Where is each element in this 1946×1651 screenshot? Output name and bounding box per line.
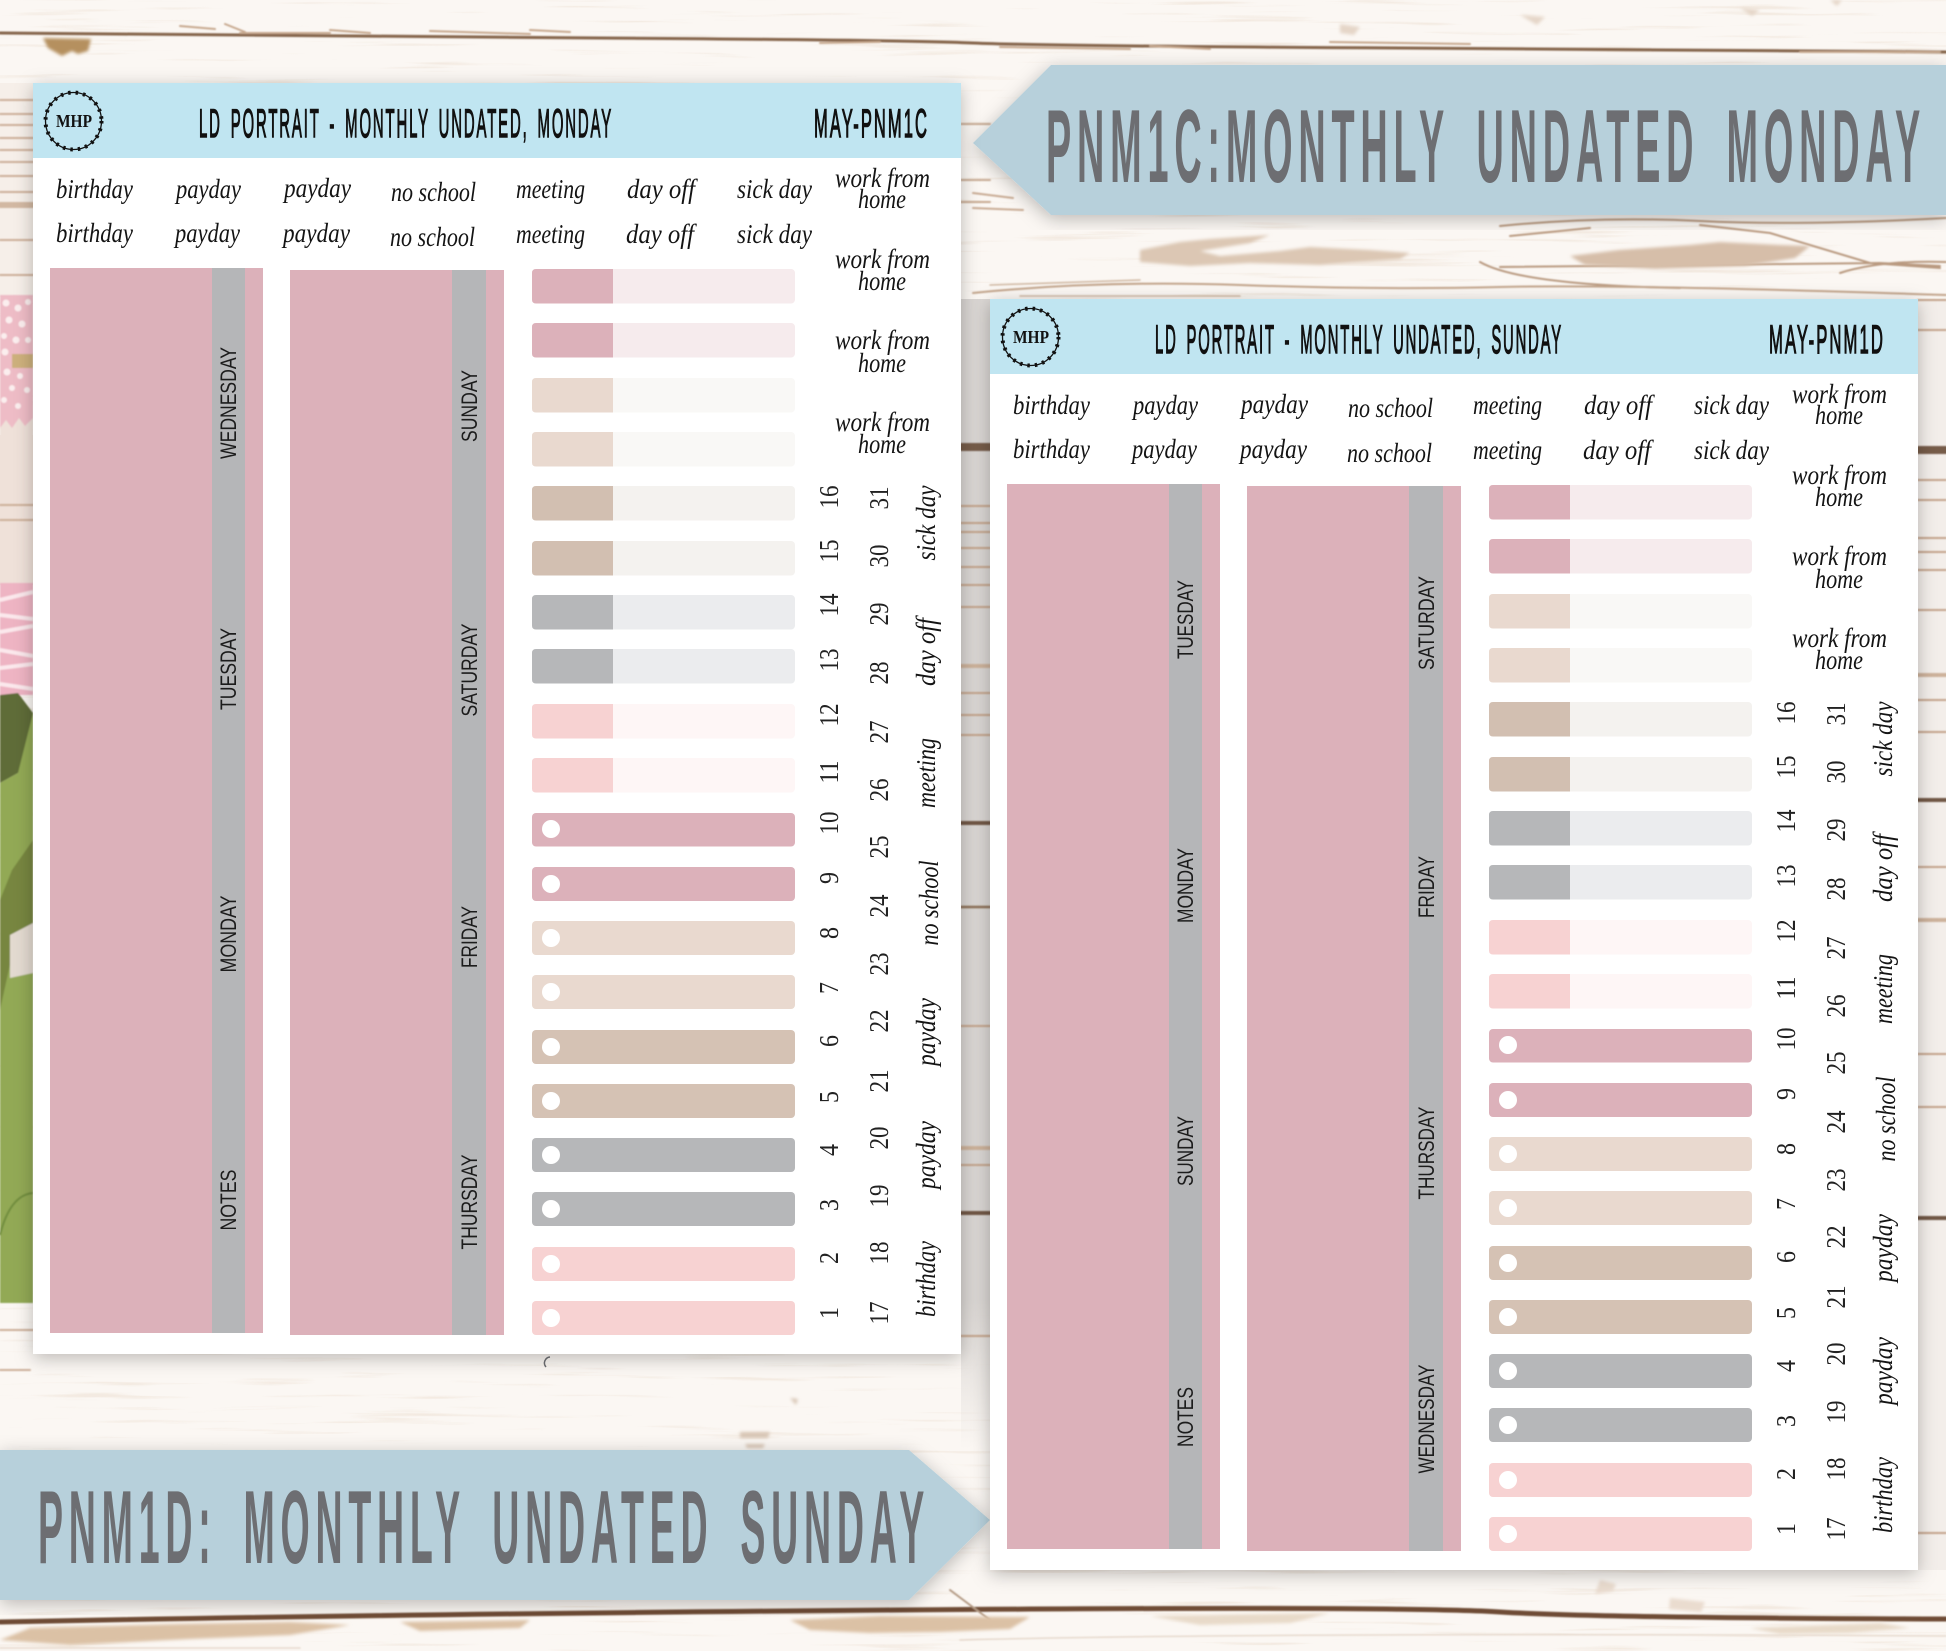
work from home stickers: work from — [1792, 460, 1887, 490]
left vertical weekday panel: NOTES — [216, 1170, 241, 1230]
rotated date numbers 1 to 16: 7 — [814, 982, 844, 994]
script word stickers, two rows — [1013, 389, 1769, 468]
rotated date numbers 17 to 31: 30 — [864, 544, 894, 568]
colour bars with white dot — [1489, 1029, 1752, 1551]
left vertical weekday panel: TUESDAY — [216, 628, 241, 710]
decorative flowers and leaves on left edge — [0, 295, 33, 1303]
rotated date numbers 17 to 31: 29 — [1821, 818, 1851, 842]
right vertical weekday panel: WEDNESDAY — [1414, 1364, 1439, 1474]
script word stickers, two rows: meeting — [1473, 435, 1542, 465]
work from home stickers: work from — [835, 325, 930, 355]
rotated date numbers 17 to 31: 26 — [864, 778, 894, 802]
left vertical weekday panel: MONDAY — [216, 895, 241, 972]
rotated date numbers 1 to 16: 14 — [1771, 809, 1801, 832]
script word stickers, two rows: meeting — [516, 174, 585, 204]
script word stickers, two rows: day off — [626, 219, 697, 249]
script word stickers, two rows: birthday — [1013, 390, 1090, 420]
script word stickers, two rows: payday — [1239, 389, 1308, 419]
right vertical weekday panel: THURSDAY — [457, 1154, 482, 1250]
rotated date numbers 1 to 16: 5 — [1771, 1307, 1801, 1319]
rotated date numbers 1 to 16: 11 — [814, 760, 844, 784]
rotated date numbers 1 to 16: 15 — [814, 540, 844, 562]
left vertical weekday panel: WEDNESDAY — [216, 347, 241, 459]
script word stickers, two rows: payday — [1130, 434, 1197, 464]
script word stickers, two rows: no school — [391, 177, 476, 207]
rotated date numbers 1 to 16: 13 — [814, 648, 844, 672]
work from home stickers — [1792, 379, 1887, 675]
rotated date numbers 17 to 31: 26 — [1821, 994, 1851, 1018]
rotated date numbers 17 to 31: 22 — [1821, 1226, 1851, 1248]
rotated script labels: sick day — [911, 485, 941, 560]
rotated date numbers 1 to 16: 8 — [814, 927, 844, 939]
rotated date numbers 17 to 31: 31 — [864, 486, 894, 510]
rotated date numbers 17 to 31: 18 — [864, 1242, 894, 1264]
left vertical weekday panel: SUNDAY — [1173, 1116, 1198, 1186]
rotated date numbers 17 to 31: 27 — [864, 720, 894, 744]
right vertical weekday panel — [1247, 486, 1461, 1551]
header band: LD PORTRAIT - MONTHLY UNDATED, MONDAY — [199, 102, 613, 146]
right vertical weekday panel: FRIDAY — [1414, 856, 1439, 918]
icon: MHP wreath logo — [1002, 308, 1058, 366]
rotated date numbers 1 to 16: 2 — [814, 1252, 844, 1264]
work from home stickers — [835, 163, 930, 459]
rotated date numbers 1 to 16: 13 — [1771, 864, 1801, 888]
work from home stickers: home — [858, 184, 906, 214]
rotated date numbers 17 to 31: 28 — [1821, 878, 1851, 900]
rotated date numbers 17 to 31: 30 — [1821, 760, 1851, 784]
right vertical weekday panel — [290, 270, 504, 1335]
rotated date numbers 1 to 16: 4 — [814, 1144, 844, 1156]
rotated script labels — [911, 485, 944, 1317]
rotated date numbers 1 to 16: 8 — [1771, 1143, 1801, 1155]
rotated date numbers 17 to 31: 24 — [1821, 1110, 1851, 1134]
work from home stickers: work from — [835, 244, 930, 274]
rotated script labels: payday — [1868, 1337, 1898, 1407]
rotated date numbers 17 to 31: 19 — [864, 1184, 894, 1208]
script word stickers, two rows: payday — [1131, 390, 1198, 420]
script word stickers, two rows: birthday — [1013, 434, 1090, 464]
rotated date numbers 1 to 16: 10 — [1771, 1028, 1801, 1050]
right vertical weekday panel: SATURDAY — [457, 623, 482, 716]
right vertical weekday panel: SUNDAY — [457, 370, 482, 442]
rotated date numbers 1 to 16: 10 — [814, 812, 844, 834]
script word stickers, two rows: payday — [1238, 434, 1307, 464]
rotated date numbers 1 to 16 — [814, 486, 844, 1319]
script word stickers, two rows: no school — [1347, 438, 1432, 468]
work from home stickers: work from — [835, 163, 930, 193]
script word stickers, two rows: payday — [282, 173, 351, 203]
script word stickers, two rows: sick day — [1694, 390, 1769, 420]
header band — [33, 83, 961, 158]
rotated date numbers 1 to 16: 3 — [814, 1199, 844, 1211]
rotated date numbers 17 to 31: 31 — [1821, 702, 1851, 726]
rotated date numbers 1 to 16: 4 — [1771, 1360, 1801, 1372]
rotated date numbers 1 to 16: 3 — [1771, 1415, 1801, 1427]
rotated date numbers 17 to 31: 21 — [1821, 1286, 1851, 1308]
header band — [990, 299, 1918, 374]
script word stickers, two rows: payday — [281, 218, 350, 248]
work from home stickers: home — [1815, 482, 1863, 512]
rotated date numbers 1 to 16: 9 — [1771, 1088, 1801, 1100]
work from home stickers: work from — [1792, 623, 1887, 653]
rotated date numbers 17 to 31: 25 — [864, 836, 894, 858]
rotated date numbers 17 to 31: 20 — [864, 1126, 894, 1150]
two-tone colour bars — [1489, 485, 1752, 1008]
rotated date numbers 1 to 16: 14 — [814, 593, 844, 616]
rotated date numbers 17 to 31: 21 — [864, 1070, 894, 1092]
rotated script labels: payday — [1868, 1214, 1898, 1284]
small hook mark below first sheet — [544, 1357, 550, 1367]
work from home stickers: home — [1815, 564, 1863, 594]
work from home stickers: home — [858, 348, 906, 378]
two-tone colour bars — [532, 269, 795, 792]
rotated script labels: birthday — [1868, 1457, 1898, 1533]
rotated date numbers 1 to 16: 5 — [814, 1091, 844, 1103]
script word stickers, two rows: sick day — [1694, 435, 1769, 465]
rotated script labels: meeting — [1868, 954, 1898, 1024]
rotated script labels: day off — [1868, 831, 1898, 902]
panel: sticker sheet PNM1D (Sunday) — [990, 299, 1918, 1570]
rotated date numbers 1 to 16: 12 — [814, 704, 844, 726]
icon: MHP wreath logo: MHP — [56, 111, 92, 131]
script word stickers, two rows: payday — [174, 174, 241, 204]
left vertical weekday panel: MONDAY — [1173, 848, 1198, 923]
rotated date numbers 17 to 31 — [864, 486, 894, 1324]
rotated date numbers 1 to 16: 12 — [1771, 920, 1801, 942]
rotated date numbers 1 to 16: 6 — [1771, 1251, 1801, 1263]
script word stickers, two rows: day off — [1584, 390, 1655, 420]
left vertical weekday panel: NOTES — [1173, 1387, 1198, 1447]
rotated date numbers 17 to 31: 24 — [864, 894, 894, 918]
rotated date numbers 1 to 16: 7 — [1771, 1198, 1801, 1210]
right vertical weekday panel: THURSDAY — [1414, 1106, 1439, 1200]
rotated date numbers 1 to 16: 16 — [1771, 702, 1801, 724]
rotated date numbers 17 to 31: 23 — [1821, 1168, 1851, 1192]
rotated script labels: no school — [1871, 1076, 1901, 1162]
left vertical weekday panel: TUESDAY — [1173, 580, 1198, 659]
rotated date numbers 1 to 16 — [1771, 702, 1801, 1535]
rotated date numbers 17 to 31: 17 — [1821, 1518, 1851, 1540]
script word stickers, two rows: meeting — [1473, 390, 1542, 420]
right vertical weekday panel: FRIDAY — [457, 906, 482, 968]
work from home stickers: work from — [1792, 541, 1887, 571]
work from home stickers: home — [1815, 645, 1863, 675]
script word stickers, two rows: birthday — [56, 174, 133, 204]
rotated date numbers 1 to 16: 6 — [814, 1035, 844, 1047]
rotated date numbers 17 to 31 — [1821, 702, 1851, 1540]
rotated date numbers 17 to 31: 28 — [864, 662, 894, 684]
left vertical weekday panel — [1007, 484, 1220, 1549]
rotated script labels: birthday — [911, 1241, 941, 1317]
rotated date numbers 17 to 31: 27 — [1821, 936, 1851, 960]
rotated date numbers 1 to 16: 15 — [1771, 756, 1801, 778]
rotated date numbers 1 to 16: 9 — [814, 872, 844, 884]
rotated date numbers 17 to 31: 17 — [864, 1302, 894, 1324]
rotated date numbers 1 to 16: 11 — [1771, 976, 1801, 1000]
colour bars with white dot — [532, 813, 795, 1335]
script word stickers, two rows — [56, 173, 812, 252]
work from home stickers: work from — [835, 407, 930, 437]
panel: sticker sheet PNM1C (Monday) — [33, 83, 961, 1354]
work from home stickers: home — [858, 266, 906, 296]
rotated script labels: no school — [914, 860, 944, 946]
work from home stickers: home — [858, 429, 906, 459]
rotated date numbers 1 to 16: 1 — [814, 1307, 844, 1319]
right vertical weekday panel: SATURDAY — [1414, 576, 1439, 670]
rotated date numbers 17 to 31: 22 — [864, 1010, 894, 1032]
rotated date numbers 17 to 31: 23 — [864, 952, 894, 976]
rotated script labels: day off — [911, 615, 941, 686]
rotated date numbers 1 to 16: 2 — [1771, 1468, 1801, 1480]
script word stickers, two rows: payday — [173, 218, 240, 248]
work from home stickers: home — [1815, 400, 1863, 430]
rotated date numbers 1 to 16: 16 — [814, 486, 844, 508]
script word stickers, two rows: day off — [1583, 435, 1654, 465]
rotated script labels: payday — [911, 998, 941, 1068]
script word stickers, two rows: meeting — [516, 219, 585, 249]
left vertical weekday panel — [50, 268, 263, 1333]
script word stickers, two rows: day off — [627, 174, 698, 204]
rotated date numbers 17 to 31: 18 — [1821, 1458, 1851, 1480]
rotated date numbers 17 to 31: 29 — [864, 602, 894, 626]
rotated script labels — [1868, 701, 1901, 1533]
rotated date numbers 1 to 16: 1 — [1771, 1523, 1801, 1535]
script word stickers, two rows: sick day — [737, 174, 812, 204]
script word stickers, two rows: sick day — [737, 219, 812, 249]
rotated date numbers 17 to 31: 25 — [1821, 1052, 1851, 1074]
rotated date numbers 17 to 31: 19 — [1821, 1400, 1851, 1424]
callout arrow: PNM1D monthly undated Sunday — [0, 1450, 990, 1600]
script word stickers, two rows: no school — [1348, 393, 1433, 423]
header band: MAY-PNM1C — [814, 102, 929, 146]
rotated script labels: payday — [911, 1121, 941, 1191]
script word stickers, two rows: no school — [390, 222, 475, 252]
rotated script labels: meeting — [911, 738, 941, 808]
rotated date numbers 17 to 31: 20 — [1821, 1342, 1851, 1366]
rotated script labels: sick day — [1868, 701, 1898, 776]
work from home stickers: work from — [1792, 379, 1887, 409]
icon: MHP wreath logo — [46, 92, 102, 150]
icon: MHP wreath logo: MHP — [1013, 327, 1049, 347]
script word stickers, two rows: birthday — [56, 218, 133, 248]
